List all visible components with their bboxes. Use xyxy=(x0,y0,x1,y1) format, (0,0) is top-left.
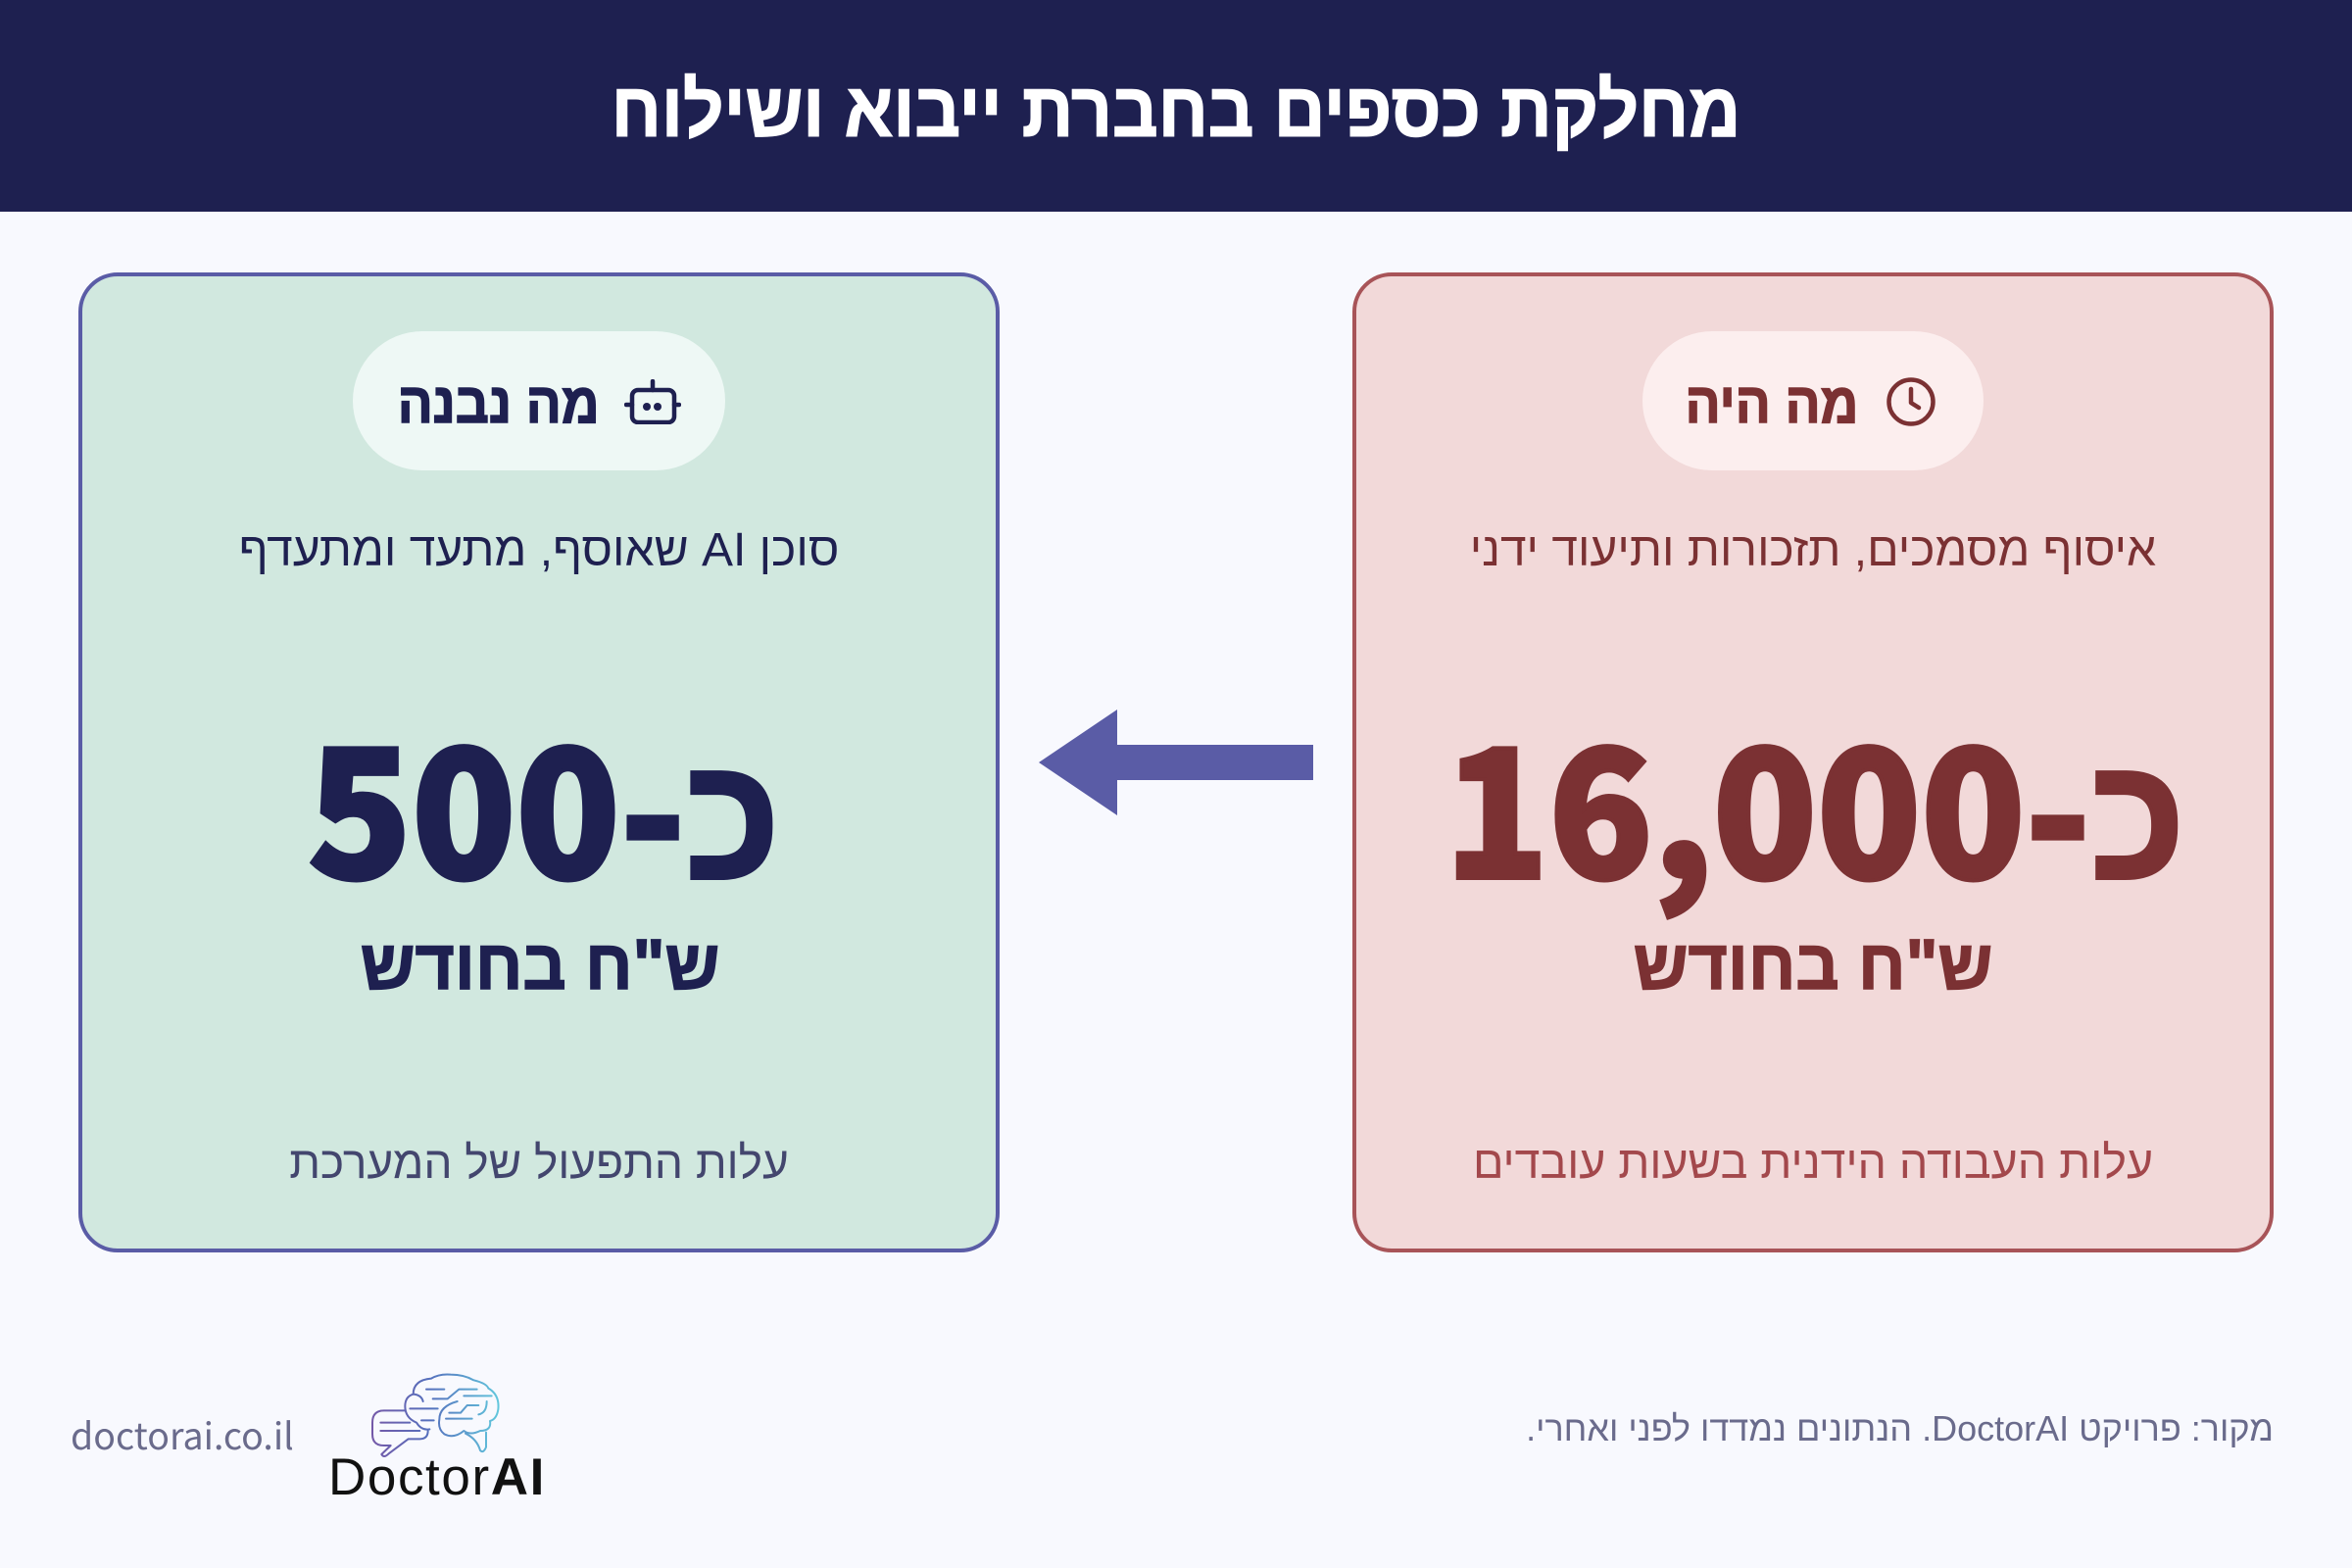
after value: כ-500 xyxy=(308,677,780,929)
pill: before heading xyxy=(1642,331,1984,470)
before description: איסוף מסמכים, תזכורות ותיעוד ידני xyxy=(1470,524,2156,576)
after note: עלות התפעול של המערכת xyxy=(289,1137,789,1188)
panel: after xyxy=(78,272,1000,1252)
icon: clock xyxy=(1886,377,1936,426)
after unit: ש"ח בחודש xyxy=(361,926,719,1004)
before heading text: מה היה xyxy=(1686,371,1858,435)
title banner xyxy=(0,0,2352,212)
icon: robot xyxy=(624,379,681,424)
icon: brain and chat bubble xyxy=(371,1374,500,1457)
pill: after heading xyxy=(353,331,725,470)
source note: מקור: פרויקט DoctorAI. הנתונים נמדדו לפני ואחרי. xyxy=(1526,1408,2274,1448)
panel: before xyxy=(1352,272,2274,1252)
after heading text: מה נבנה xyxy=(398,371,600,435)
website: doctorai.co.il xyxy=(71,1406,294,1460)
logo: DoctorAI xyxy=(328,1374,546,1506)
before value: כ-16,000 xyxy=(1445,677,2185,929)
logo wordmark: DoctorAI xyxy=(328,1448,546,1506)
title: מחלקת כספים בחברת ייבוא ושילוח xyxy=(612,67,1740,153)
arrow xyxy=(1039,710,1313,815)
before unit: ש"ח בחודש xyxy=(1634,926,1992,1004)
before note: עלות העבודה הידנית בשעות עובדים xyxy=(1473,1137,2153,1188)
after description: סוכן AI שאוסף, מתעד ומתעדף xyxy=(239,524,839,576)
